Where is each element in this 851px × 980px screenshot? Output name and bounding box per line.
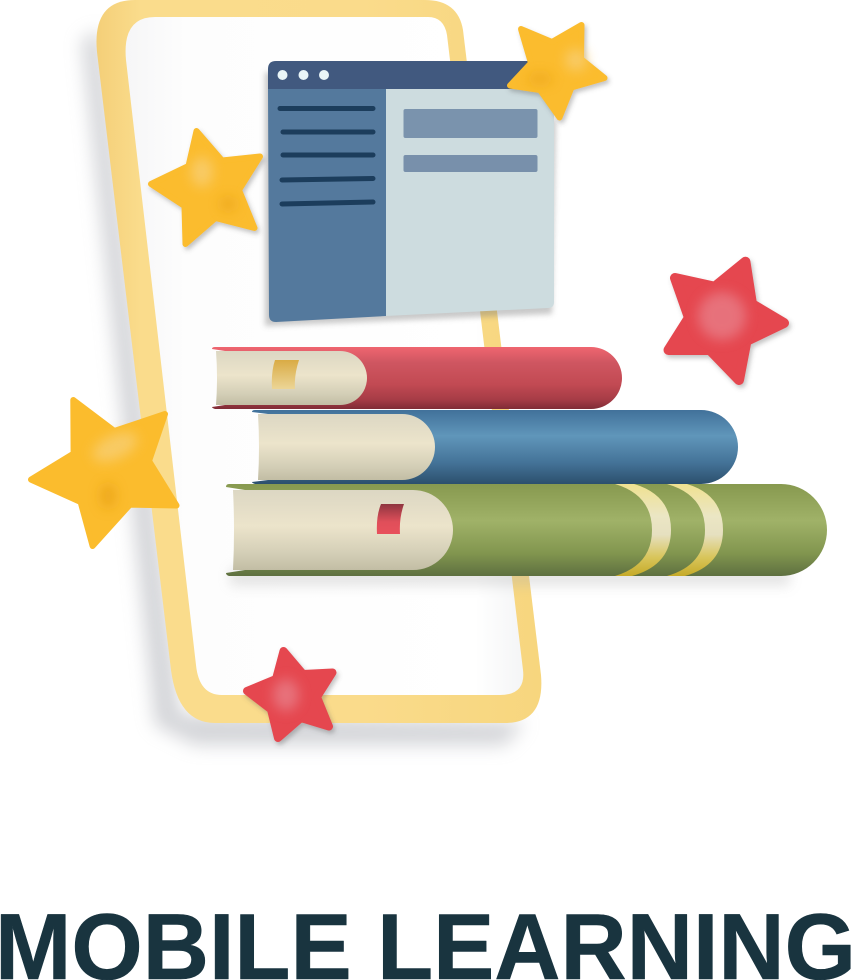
content block large bbox=[404, 109, 538, 138]
star: upper left yellow bbox=[151, 131, 260, 244]
window content area bbox=[386, 89, 554, 316]
blue book bbox=[252, 410, 738, 484]
window control dots bbox=[278, 70, 329, 80]
gold bookmark bbox=[272, 360, 299, 389]
green book bbox=[226, 484, 827, 576]
star: top right yellow bbox=[510, 25, 604, 118]
red book bbox=[212, 347, 622, 409]
stack of books bbox=[212, 347, 827, 586]
sidebar menu lines bbox=[280, 108, 373, 204]
star: lower left yellow bbox=[31, 400, 176, 546]
star: bottom red bbox=[247, 651, 332, 738]
window sidebar bbox=[268, 89, 386, 322]
spine band right bbox=[667, 484, 723, 576]
star: right red bbox=[668, 262, 784, 380]
phone screen bbox=[126, 17, 523, 695]
open app window bbox=[265, 61, 556, 326]
phone bbox=[82, 0, 541, 745]
spine band left bbox=[615, 484, 671, 576]
window title bar bbox=[268, 61, 535, 89]
content block small bbox=[404, 155, 538, 172]
red bookmark bbox=[377, 504, 404, 534]
